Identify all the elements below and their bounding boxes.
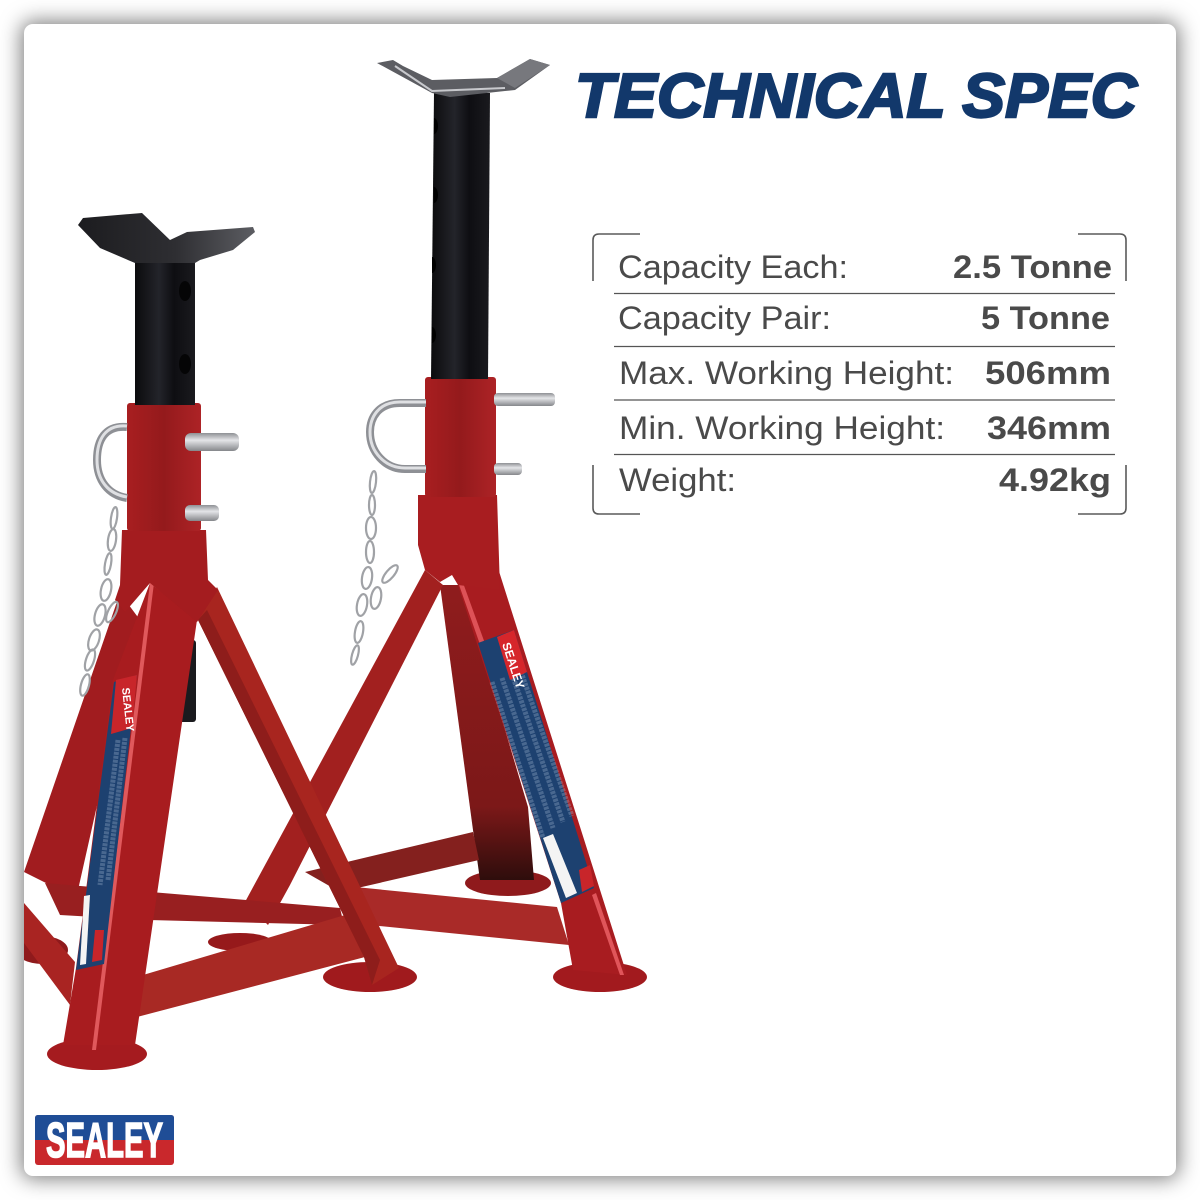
front stand chain [78, 507, 120, 697]
back stand right leg [458, 565, 627, 975]
row: max working height [619, 355, 1111, 391]
row: min working height [619, 410, 1111, 446]
back stand saddle [377, 59, 550, 97]
label brand name: SEALEY [499, 641, 527, 691]
row: max working height: 506mm [985, 355, 1111, 391]
front stand lower black tube [182, 640, 196, 722]
label brand tag [497, 630, 527, 680]
label fine print [100, 738, 125, 885]
front stand leg label [76, 675, 137, 970]
row: weight: Weight: [619, 462, 736, 498]
back axle stand [208, 59, 647, 992]
back stand rear cross bar [305, 832, 479, 892]
back stand collar [425, 377, 496, 497]
front stand upper tube hole [179, 281, 191, 301]
front axle stand [16, 213, 417, 1070]
label red corner [92, 930, 104, 962]
front stand hidden foot [24, 938, 68, 964]
illustration: pair of axle stands [16, 59, 647, 1070]
front stand hub [115, 530, 218, 622]
table corner brackets [593, 234, 1126, 514]
logo: Sealey: SEALEY [46, 1114, 163, 1168]
front stand left leg [24, 593, 140, 890]
row: capacity each: Capacity Each: [618, 249, 848, 285]
title: TECHNICAL SPEC [575, 62, 1138, 131]
front stand back bar [45, 883, 344, 925]
back stand lower pin [494, 463, 522, 475]
back stand leg highlight [459, 585, 484, 642]
label white strip [543, 834, 577, 898]
back stand rear foot [465, 870, 551, 896]
front stand lower tube hole [179, 354, 191, 374]
back stand lower leg highlight [592, 893, 624, 975]
back stand upper pin [494, 393, 555, 406]
label fine print [492, 672, 572, 838]
back stand hub [418, 495, 500, 590]
logo: Sealey [35, 1114, 174, 1168]
row: capacity each: 2.5 Tonne [953, 249, 1112, 285]
back stand rear leg [440, 585, 534, 880]
label brand name: SEALEY [119, 687, 136, 733]
spec table [593, 234, 1126, 514]
front stand right leg shadow face [198, 610, 380, 985]
front stand right leg [198, 587, 399, 985]
front stand leg highlight [92, 583, 154, 1050]
front stand collar [127, 403, 201, 531]
front stand upper pin [185, 433, 239, 451]
row: capacity pair: 5 Tonne [981, 300, 1110, 336]
back stand black tube [431, 93, 490, 379]
back stand left foot [208, 933, 272, 951]
back stand leg label [478, 630, 594, 903]
row: weight: 4.92kg [999, 462, 1111, 498]
back stand tube holes [432, 118, 438, 343]
front stand lower pin [185, 505, 219, 521]
front stand front bar [137, 915, 365, 1017]
front stand black tube [135, 255, 195, 405]
label white strip [80, 895, 90, 965]
back stand U-bolt [370, 402, 426, 469]
row: capacity pair: Capacity Pair: [618, 300, 831, 336]
row: max working height: Max. Working Height: [619, 355, 954, 391]
back stand left leg [245, 570, 443, 925]
back stand chain [350, 471, 400, 665]
row: min working height: 346mm [987, 410, 1111, 446]
row: capacity each [618, 249, 1112, 285]
front stand U-bolt [97, 426, 127, 498]
back stand right cross bar [345, 886, 569, 945]
front stand left foot [47, 1042, 147, 1070]
front stand front leg [63, 583, 197, 1045]
row: capacity pair [618, 300, 1110, 336]
row: weight [619, 462, 1111, 498]
front stand saddle [78, 213, 255, 263]
label red corner [579, 865, 594, 892]
back stand right foot [553, 962, 647, 992]
front stand right foot [323, 962, 417, 992]
label brand tag [111, 675, 137, 734]
front stand lower left bar [24, 903, 75, 1005]
row: min working height: Min. Working Height: [619, 410, 945, 446]
